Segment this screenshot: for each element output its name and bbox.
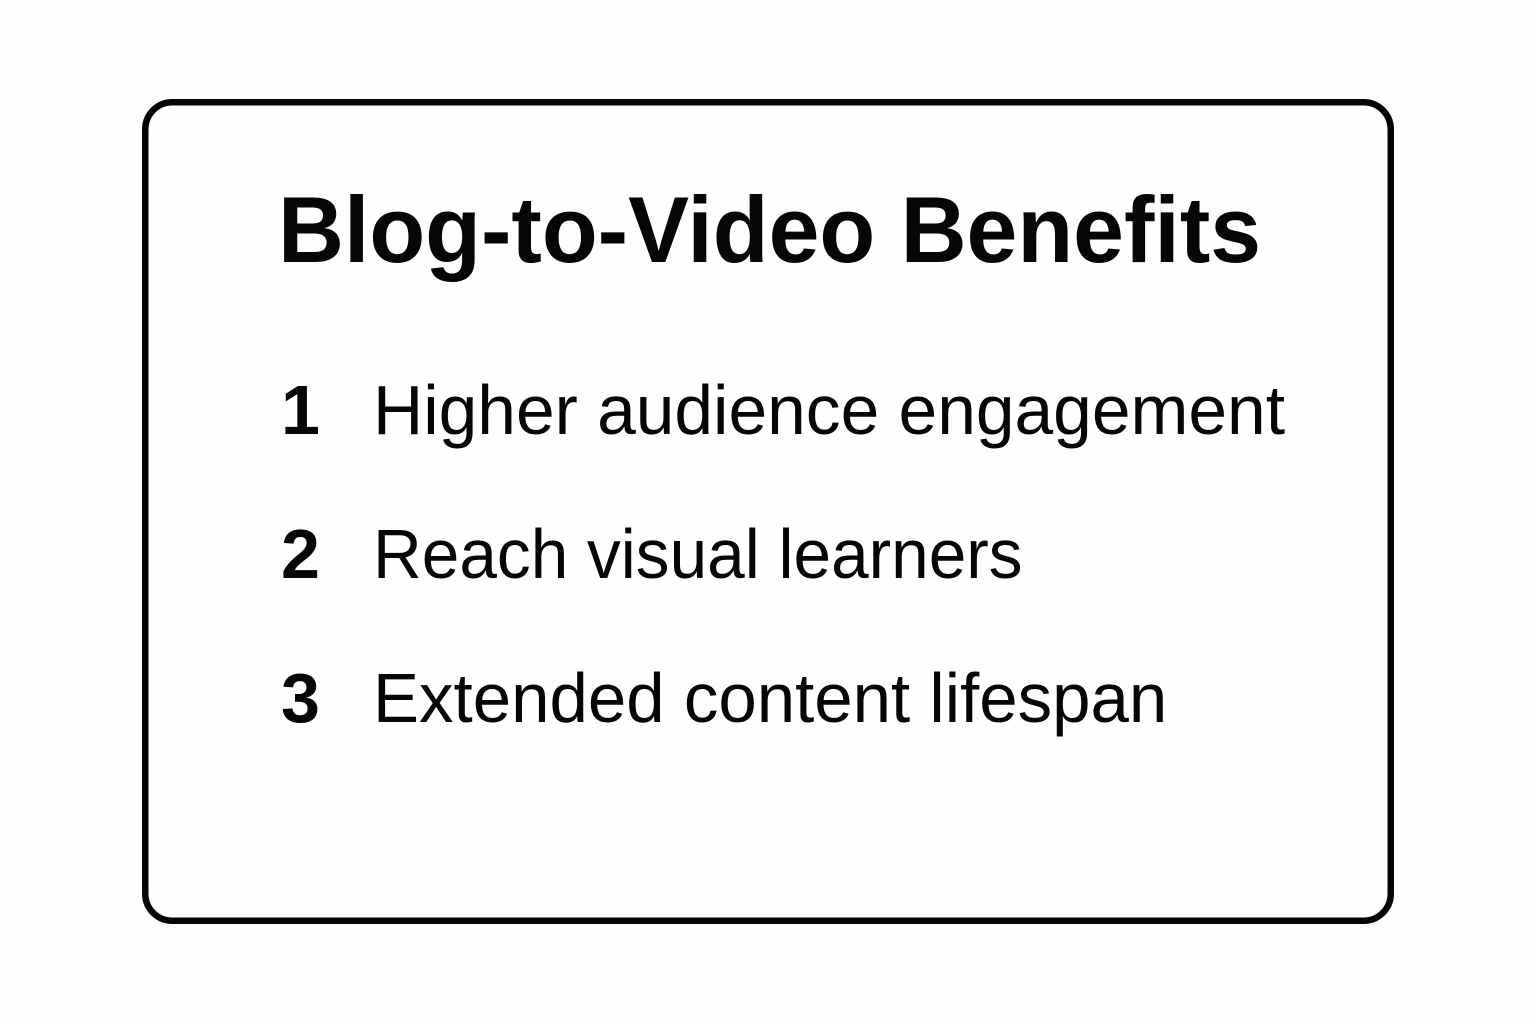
list number 2: 2 <box>281 515 320 593</box>
list number 3: 3 <box>281 659 320 737</box>
benefit 3 text: Extended content lifespan <box>373 659 1167 737</box>
title: Blog-to-Video Benefits <box>278 177 1261 282</box>
list number 1: 1 <box>281 371 320 449</box>
benefit 1 text: Higher audience engagement <box>373 371 1285 449</box>
benefit 2 text: Reach visual learners <box>373 515 1023 593</box>
